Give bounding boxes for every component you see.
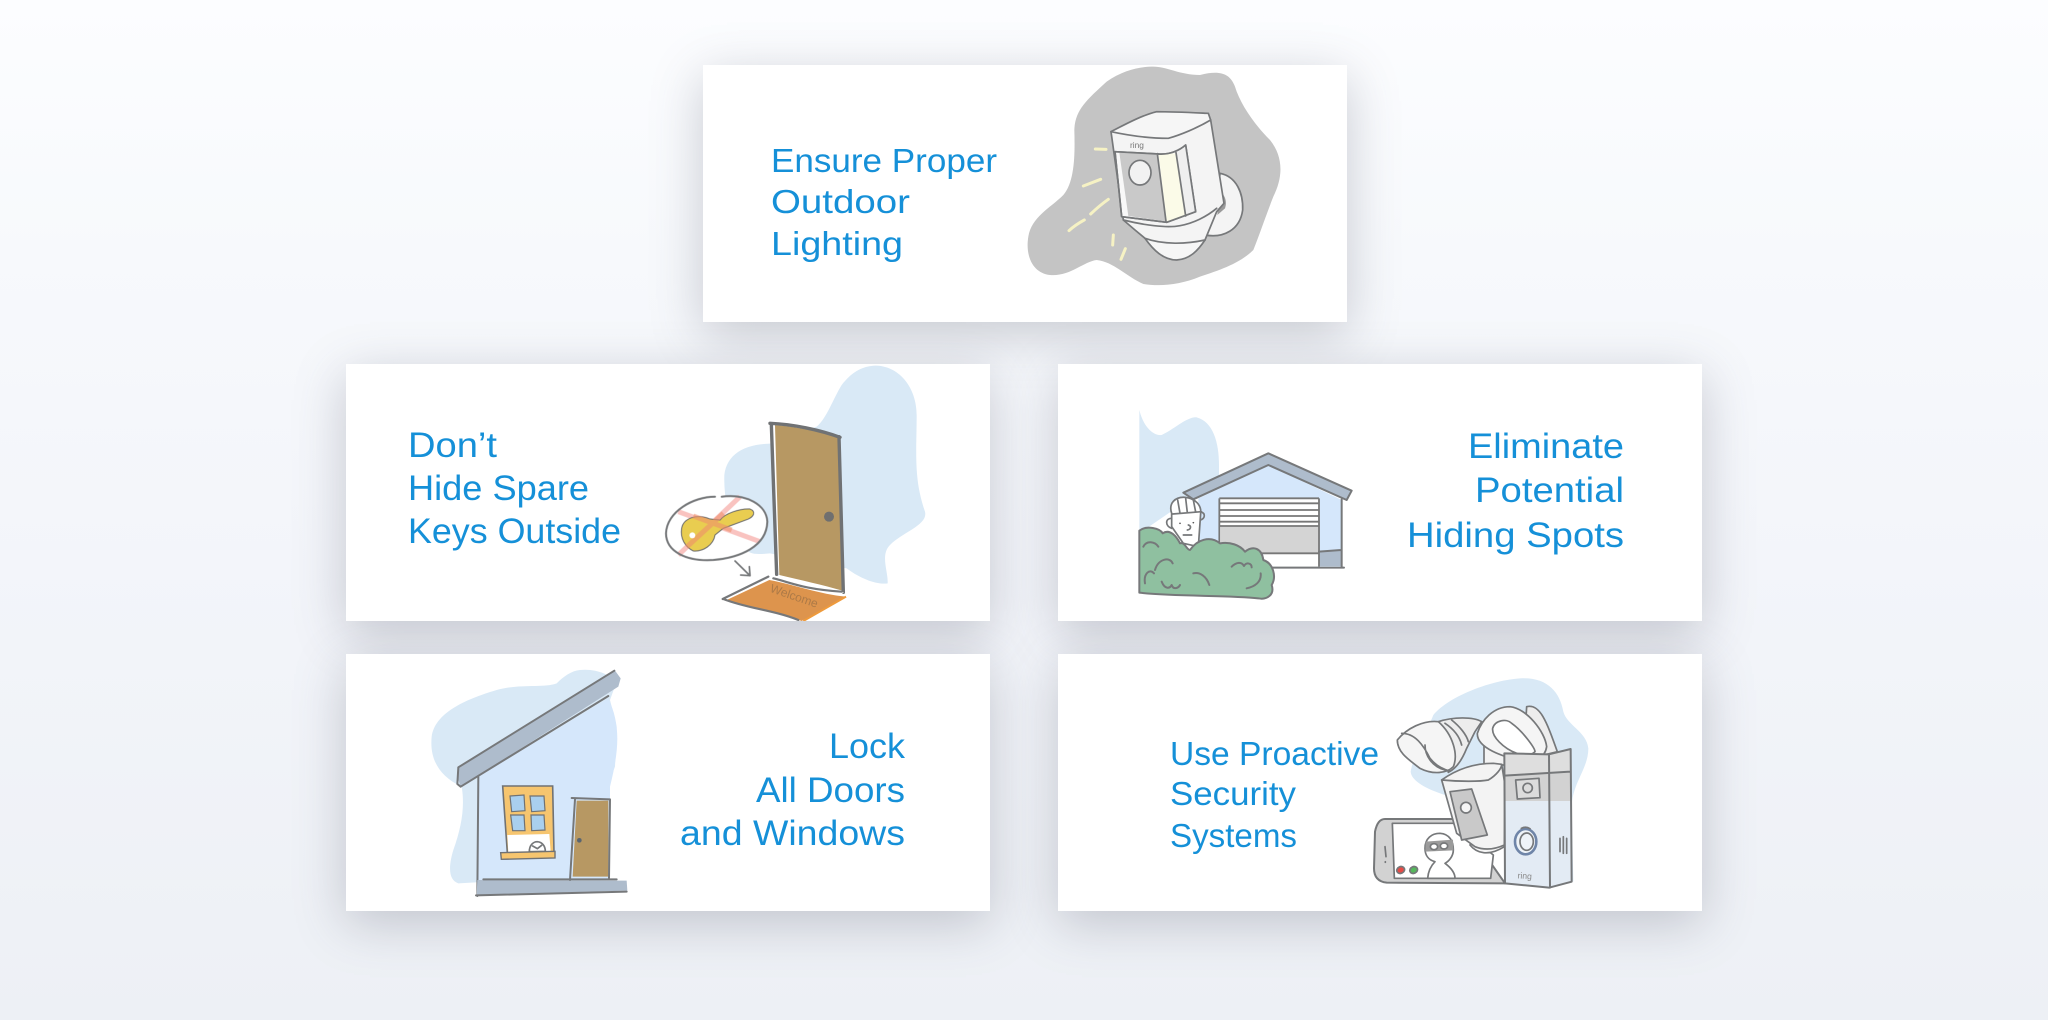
icon: floodlights [1397, 706, 1557, 773]
icon: security camera [1442, 763, 1505, 853]
heading: Use Proactive Security Systems [1170, 735, 1379, 854]
panel: eliminate potential hiding spots [1058, 364, 1702, 621]
heading: Lock All Doors and Windows: and Windows [680, 814, 905, 853]
icon: garage with person behind bush [1139, 410, 1352, 599]
heading: Use Proactive Security Systems: Use Proactive [1170, 735, 1379, 772]
heading: Don't Hide Spare Keys Outside [408, 426, 621, 551]
panel: lock all doors and windows [346, 654, 990, 911]
icon: person peeking [1167, 497, 1204, 547]
panel: don't hide spare keys outside [346, 364, 990, 621]
icon: video doorbell [1504, 749, 1572, 888]
heading: Ensure Proper Outdoor Lighting: Ensure Proper [771, 142, 997, 179]
heading: Ensure Proper Outdoor Lighting [771, 142, 997, 262]
heading: Don't Hide Spare Keys Outside: Hide Spare [408, 469, 589, 508]
heading: Eliminate Potential Hiding Spots: Hiding Spots [1407, 516, 1624, 555]
heading: Don't Hide Spare Keys Outside: Don’t [408, 426, 497, 465]
icon: phone with live video [1374, 819, 1505, 883]
icon: crossed-out key [666, 496, 767, 560]
icon: door, doormat and crossed-out key: Welcome [768, 581, 820, 611]
heading: Lock All Doors and Windows [680, 727, 906, 853]
icon: window [501, 786, 555, 859]
icon: green bush [1139, 528, 1274, 599]
panel: use proactive security systems [1058, 654, 1702, 911]
icon: front door [570, 798, 610, 880]
heading: Eliminate Potential Hiding Spots: Potential [1475, 471, 1624, 510]
heading: Use Proactive Security Systems: Security [1170, 775, 1297, 812]
heading: Lock All Doors and Windows: All Doors [756, 771, 905, 810]
heading: Use Proactive Security Systems: Systems [1170, 817, 1297, 854]
icon: outdoor security light camera: ring [1130, 140, 1144, 150]
heading: Ensure Proper Outdoor Lighting: Outdoor [771, 183, 910, 220]
heading: Lock All Doors and Windows: Lock [829, 727, 906, 766]
heading: Eliminate Potential Hiding Spots [1407, 427, 1624, 555]
heading: Ensure Proper Outdoor Lighting: Lighting [771, 225, 903, 262]
icon: door, doormat and crossed-out key [666, 366, 925, 621]
heading: Eliminate Potential Hiding Spots: Eliminate [1468, 427, 1624, 466]
icon: smart security devices [1374, 678, 1588, 888]
icon: video doorbell: ring [1517, 870, 1532, 881]
panel: ensure proper outdoor lighting [703, 65, 1347, 322]
heading: Don't Hide Spare Keys Outside: Keys Outside [408, 512, 621, 551]
icon: house with locked window and door [431, 670, 627, 896]
arrow: key to doormat [735, 561, 750, 576]
icon: outdoor security light camera [1028, 67, 1280, 285]
